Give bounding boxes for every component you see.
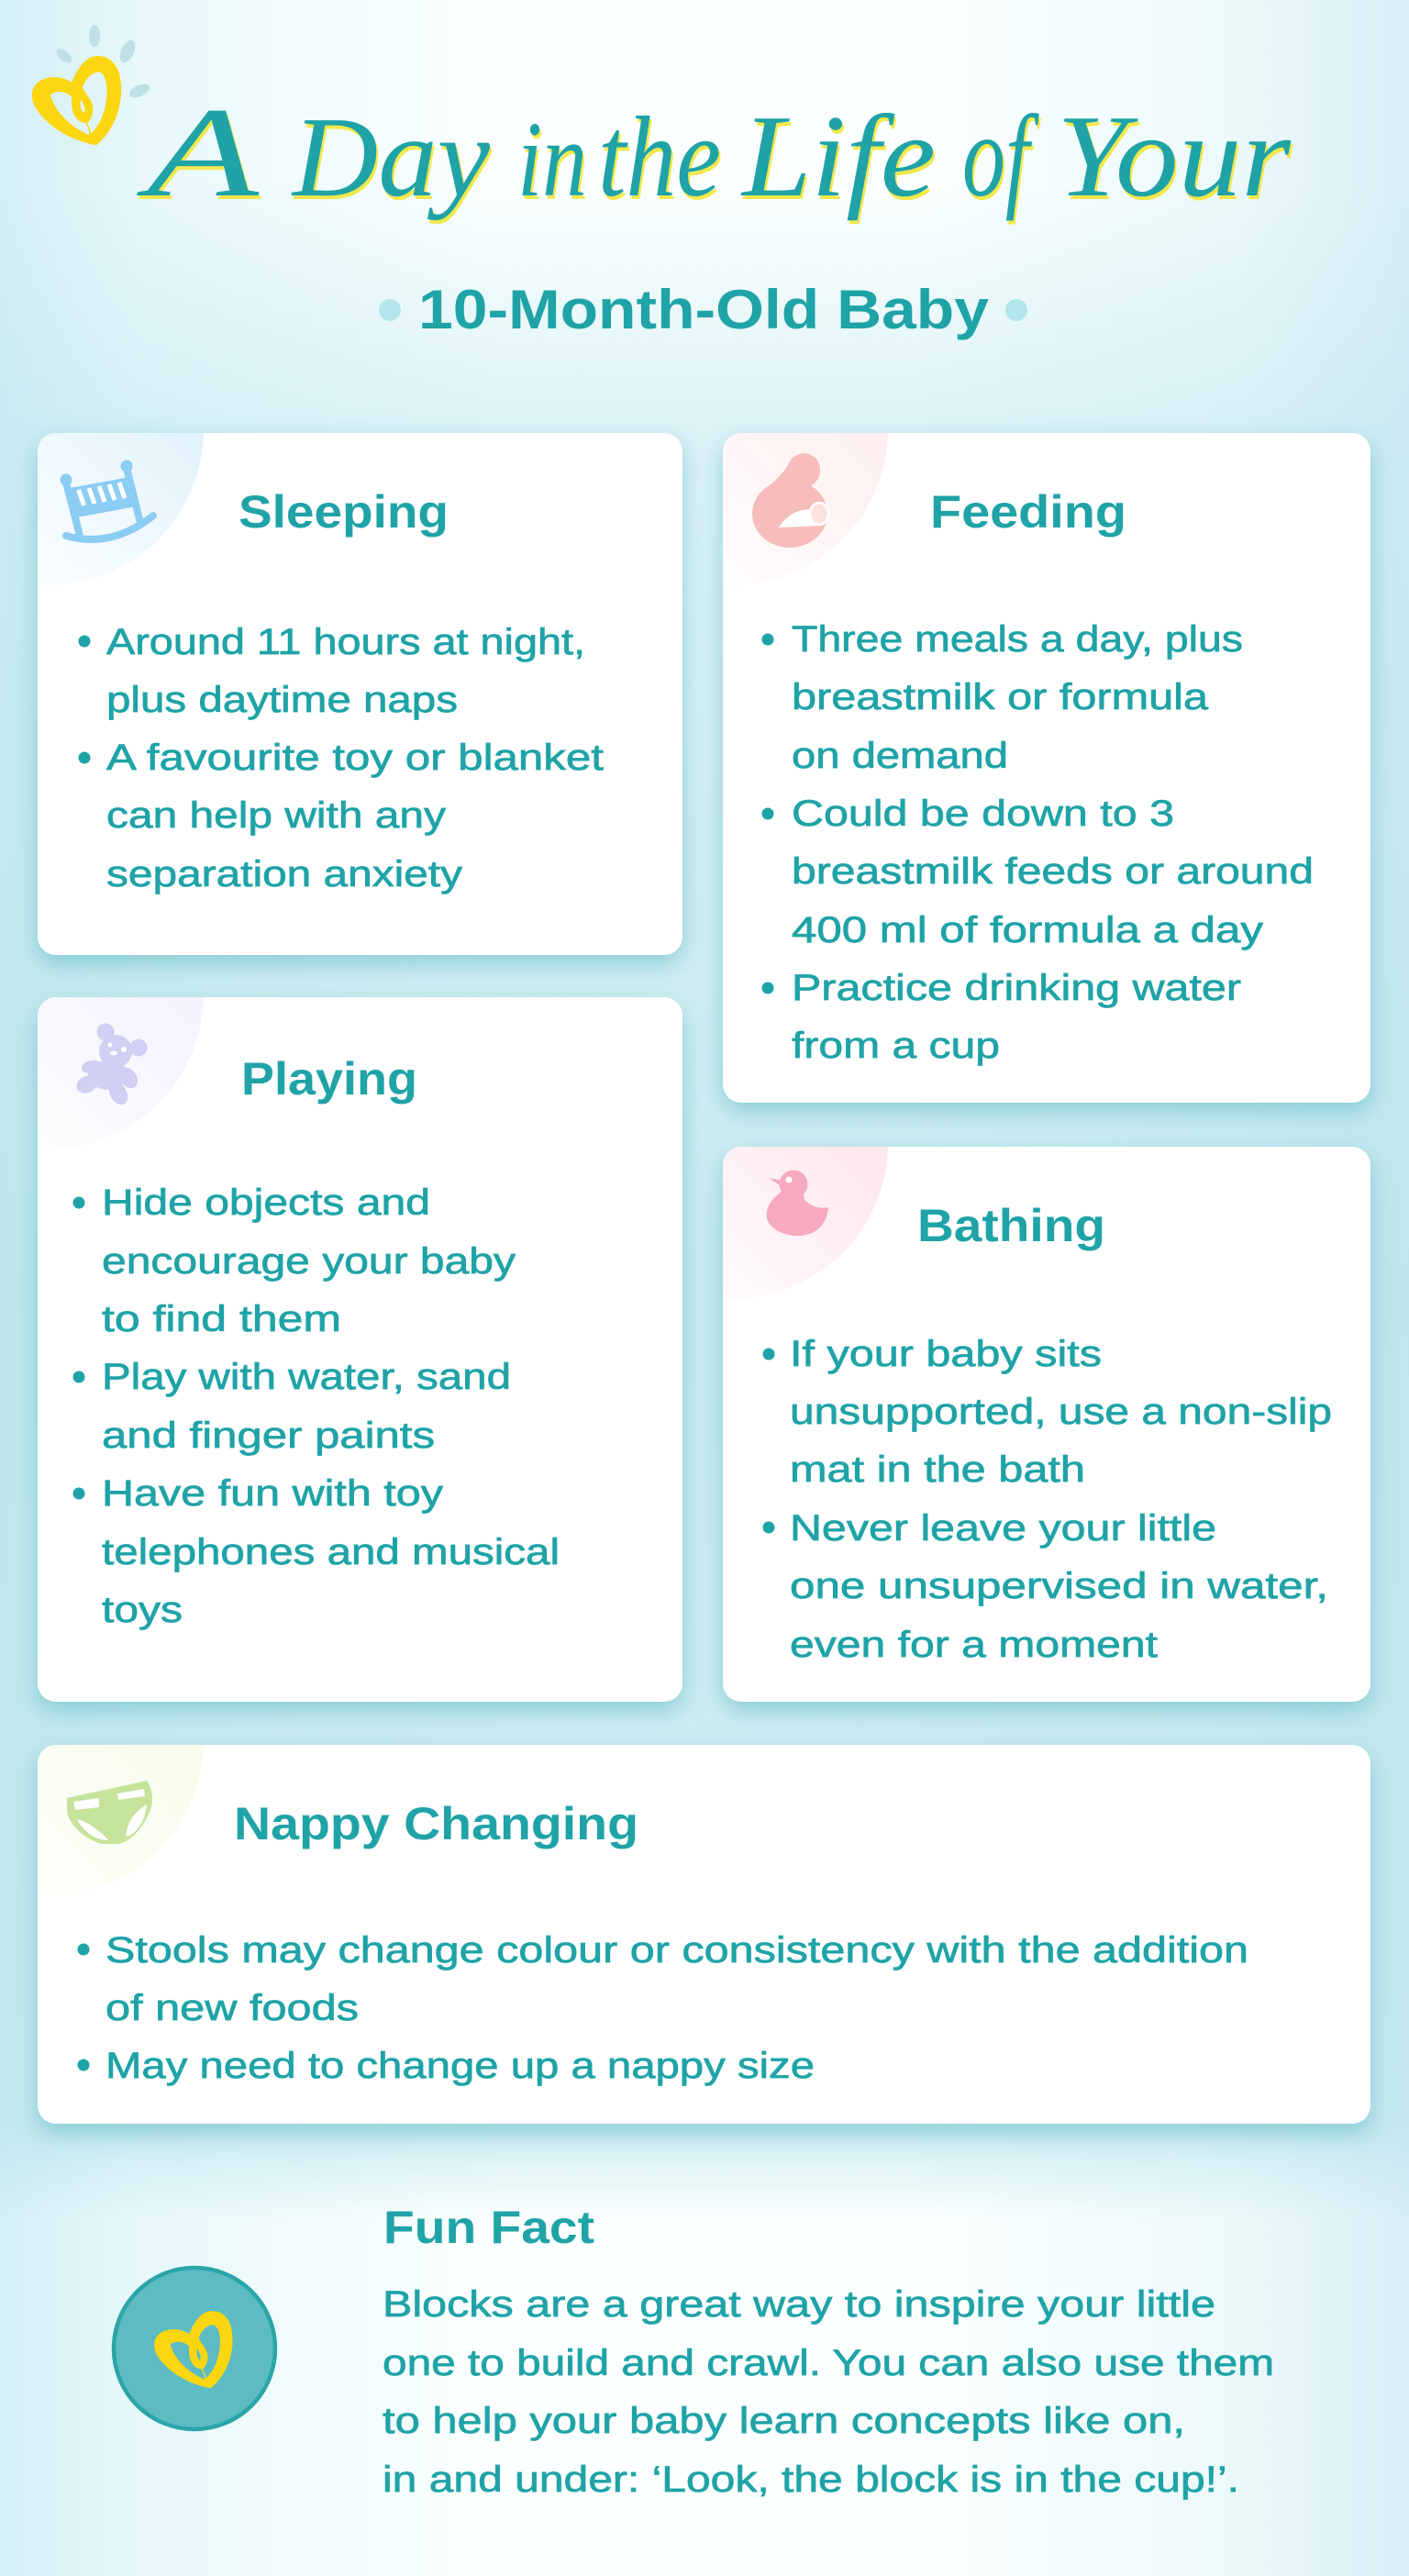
bullet list: If your baby sits <box>790 1334 1102 1374</box>
title: the <box>598 94 721 221</box>
title: A <box>137 82 260 224</box>
title: Day <box>291 94 491 221</box>
bullet list: Play with water, sand <box>102 1357 511 1397</box>
bullet list: of new foods <box>105 1988 359 2028</box>
bullet list: unsupported, use a non-slip <box>790 1392 1332 1432</box>
bullet list: Stools may change colour or consistency with the addition <box>105 1930 1248 1971</box>
bullet list: breastmilk feeds or around <box>792 851 1314 892</box>
bullet list: May need to change up a nappy size <box>105 2046 815 2086</box>
bullet list: Around 11 hours at night, <box>106 622 585 662</box>
fun fact text <box>383 2284 1274 2500</box>
bullet list <box>73 1183 560 1630</box>
bullet list: toys <box>102 1590 183 1630</box>
fun fact text: to help your baby learn concepts like on, <box>383 2401 1185 2441</box>
title: Your <box>1057 91 1292 221</box>
heading: Feeding <box>930 486 1126 538</box>
panel: sleeping <box>24 428 696 978</box>
panel: playing <box>25 993 696 1725</box>
heading: Sleeping <box>239 486 449 538</box>
icon: nappy <box>67 1781 152 1844</box>
bullet list: to find them <box>102 1299 341 1339</box>
bullet list <box>761 619 1314 1066</box>
bullet list: mat in the bath <box>790 1449 1085 1490</box>
bullet list <box>763 1334 1332 1665</box>
heading: Nappy Changing <box>234 1798 638 1849</box>
bullet list: telephones and musical <box>102 1532 560 1572</box>
bullet list: can help with any <box>106 795 446 836</box>
corner tint <box>38 997 204 1095</box>
heading: Bathing <box>917 1200 1105 1251</box>
bullet list: even for a moment <box>790 1625 1158 1665</box>
corner tint <box>723 1147 888 1290</box>
panel: nappy changing <box>25 1741 1383 2147</box>
fun fact text: in and under: ‘Look, the block is in the cup!’. <box>383 2459 1239 2500</box>
title: of <box>962 91 1039 221</box>
bullet list: breastmilk or formula <box>792 677 1209 717</box>
bullet list: Practice drinking water <box>792 968 1241 1008</box>
bullet list: Could be down to 3 <box>792 794 1174 834</box>
bullet list: on demand <box>792 736 1008 776</box>
bullet list: plus daytime naps <box>106 680 458 720</box>
bullet list: 400 ml of formula a day <box>792 910 1263 950</box>
bullet list: Have fun with toy <box>102 1473 443 1514</box>
panel: fun fact <box>383 2202 1274 2500</box>
corner tint <box>38 433 204 580</box>
title <box>137 82 1292 224</box>
title: in <box>517 99 587 219</box>
icon: rubber duck <box>767 1171 828 1236</box>
fun fact text: Blocks are a great way to inspire your little <box>383 2284 1215 2325</box>
icon: teddy bear <box>73 1024 147 1108</box>
bullet list: Three meals a day, plus <box>792 619 1243 660</box>
icon: mother and baby <box>752 449 828 548</box>
panel: feeding <box>709 428 1383 1125</box>
bullet list: one unsupervised in water, <box>790 1566 1328 1606</box>
icon: crib <box>61 461 153 539</box>
bullet list <box>79 622 604 894</box>
bullet list: and finger paints <box>102 1416 435 1456</box>
icon: fun fact heart badge <box>114 2268 275 2429</box>
bullet list: A favourite toy or blanket <box>106 738 604 778</box>
bullet list <box>77 1930 1248 2086</box>
bullet list: Never leave your little <box>790 1508 1216 1549</box>
subtitle: 10-Month-Old Baby <box>418 279 990 340</box>
heading: Playing <box>241 1053 417 1105</box>
heading: Fun Fact <box>383 2202 594 2253</box>
icon: logo heart with drops <box>32 25 151 145</box>
panel: bathing <box>710 1143 1383 1725</box>
bullet list: separation anxiety <box>106 854 462 894</box>
corner tint <box>723 433 888 554</box>
title: Life <box>740 91 936 221</box>
bullet list: Hide objects and <box>102 1183 430 1223</box>
bullet list: encourage your baby <box>102 1241 516 1282</box>
corner tint <box>38 1745 204 1884</box>
fun fact text: one to build and crawl. You can also use them <box>383 2343 1274 2383</box>
bullet list: from a cup <box>792 1026 1000 1066</box>
